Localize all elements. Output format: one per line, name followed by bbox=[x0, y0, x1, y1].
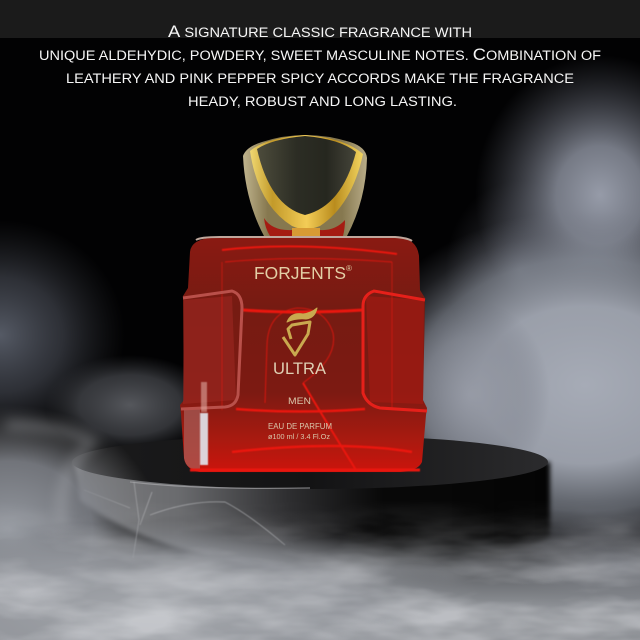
gender label: MEN bbox=[288, 396, 311, 407]
description text: LEATHERY AND PINK PEPPER SPICY ACCORDS MAKE THE FRAGRANCE bbox=[66, 71, 574, 86]
bottle highlights bbox=[190, 246, 420, 470]
perfume bottle bbox=[180, 135, 427, 472]
description text: HEADY, ROBUST AND LONG LASTING. bbox=[188, 94, 457, 109]
description text: A SIGNATURE CLASSIC FRAGRANCE WITH bbox=[168, 22, 472, 41]
logo emblem bbox=[283, 308, 317, 355]
marble veins bbox=[84, 482, 285, 558]
product name: ULTRA bbox=[273, 359, 327, 378]
bottle cap bbox=[243, 135, 367, 236]
foreground smoke bbox=[0, 410, 640, 640]
brand name: FORJENTS bbox=[254, 263, 346, 283]
description text bbox=[39, 22, 601, 109]
left window frame bbox=[181, 291, 242, 409]
right window frame bbox=[363, 291, 427, 411]
glass reflection bbox=[200, 382, 208, 465]
cap reflection bbox=[264, 218, 345, 236]
registered mark: ® bbox=[346, 264, 352, 273]
bottle top edge bbox=[196, 237, 412, 241]
product type: EAU DE PARFUM bbox=[268, 422, 332, 431]
podium bbox=[72, 435, 550, 572]
bottle body bbox=[180, 237, 427, 472]
description text: UNIQUE ALDEHYDIC, POWDERY, SWEET MASCULINE NOTES. COMBINATION OF bbox=[39, 45, 601, 64]
volume: ø100 ml / 3.4 Fl.Oz bbox=[268, 434, 331, 441]
bottle side columns bbox=[183, 296, 236, 404]
